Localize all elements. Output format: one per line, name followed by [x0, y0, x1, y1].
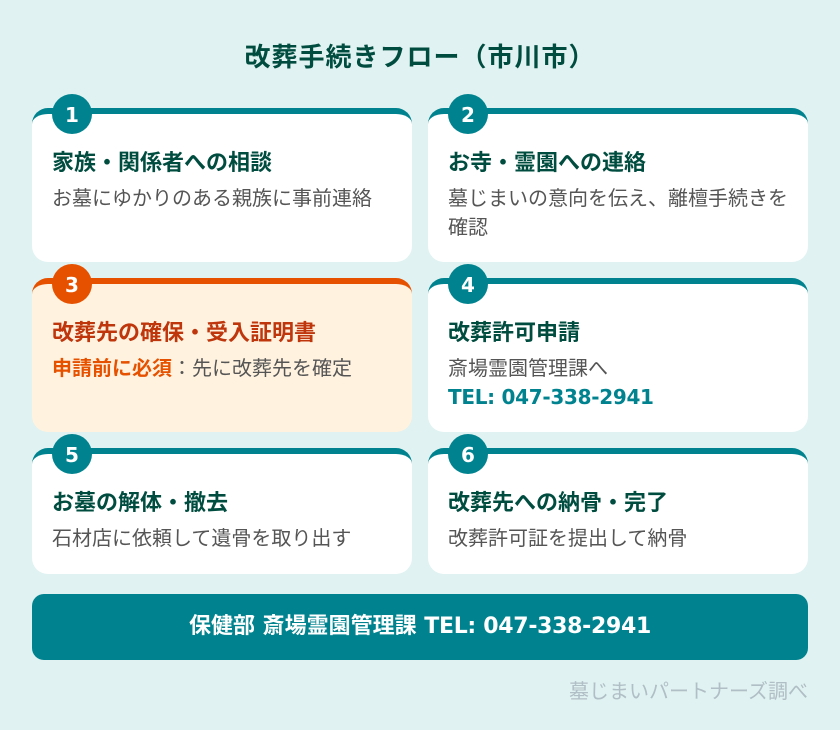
contact banner — [32, 594, 808, 660]
step 6 number — [448, 434, 488, 474]
step 1 text: お墓にゆかりのある親族に事前連絡 — [52, 186, 372, 210]
step 1 number — [52, 94, 92, 134]
step 2 heading: お寺・霊園への連絡 — [448, 151, 646, 176]
step 6 text: 改葬許可証を提出して納骨 — [448, 526, 687, 550]
step 5 number — [52, 434, 92, 474]
step 5 text: 石材店に依頼して遺骨を取り出す — [52, 526, 351, 550]
title: 改葬手続きフロー（市川市） — [244, 43, 596, 73]
panel: step 3 highlighted — [32, 278, 412, 432]
step 2 number — [448, 94, 488, 134]
step 6 heading: 改葬先への納骨・完了 — [448, 491, 668, 516]
step 4 text: TEL: 047-338-2941 — [448, 385, 654, 409]
contact banner: 保健部 斎場霊園管理課 TEL: 047-338-2941 — [189, 614, 651, 639]
step 2 number: 2 — [461, 103, 475, 127]
step 4 number: 4 — [461, 273, 475, 297]
panel: step 4 — [428, 278, 808, 432]
step 3 number: 3 — [65, 273, 79, 297]
step 2 text: 墓じまいの意向を伝え、離檀手続きを確認 — [448, 186, 788, 239]
step 1 number: 1 — [65, 103, 79, 127]
step 4 heading: 改葬許可申請 — [448, 321, 580, 346]
step 5 heading: お墓の解体・撤去 — [52, 491, 228, 516]
step 3 text: 申請前に必須：先に改葬先を確定 — [52, 356, 352, 380]
step 3 number — [52, 264, 92, 304]
step 3 heading: 改葬先の確保・受入証明書 — [52, 321, 316, 346]
step 1 heading: 家族・関係者への相談 — [52, 151, 272, 176]
source credit: 墓じまいパートナーズ調べ — [569, 679, 808, 703]
panel: step 2 — [428, 108, 808, 262]
step 4 text: 斎場霊園管理課へ — [448, 356, 608, 380]
panel: step 1 — [32, 108, 412, 262]
step 4 text — [448, 356, 654, 409]
step 4 number — [448, 264, 488, 304]
step 6 number: 6 — [461, 443, 475, 467]
panel: step 5 — [32, 448, 412, 574]
panel: step 6 — [428, 448, 808, 574]
step 5 number: 5 — [65, 443, 79, 467]
